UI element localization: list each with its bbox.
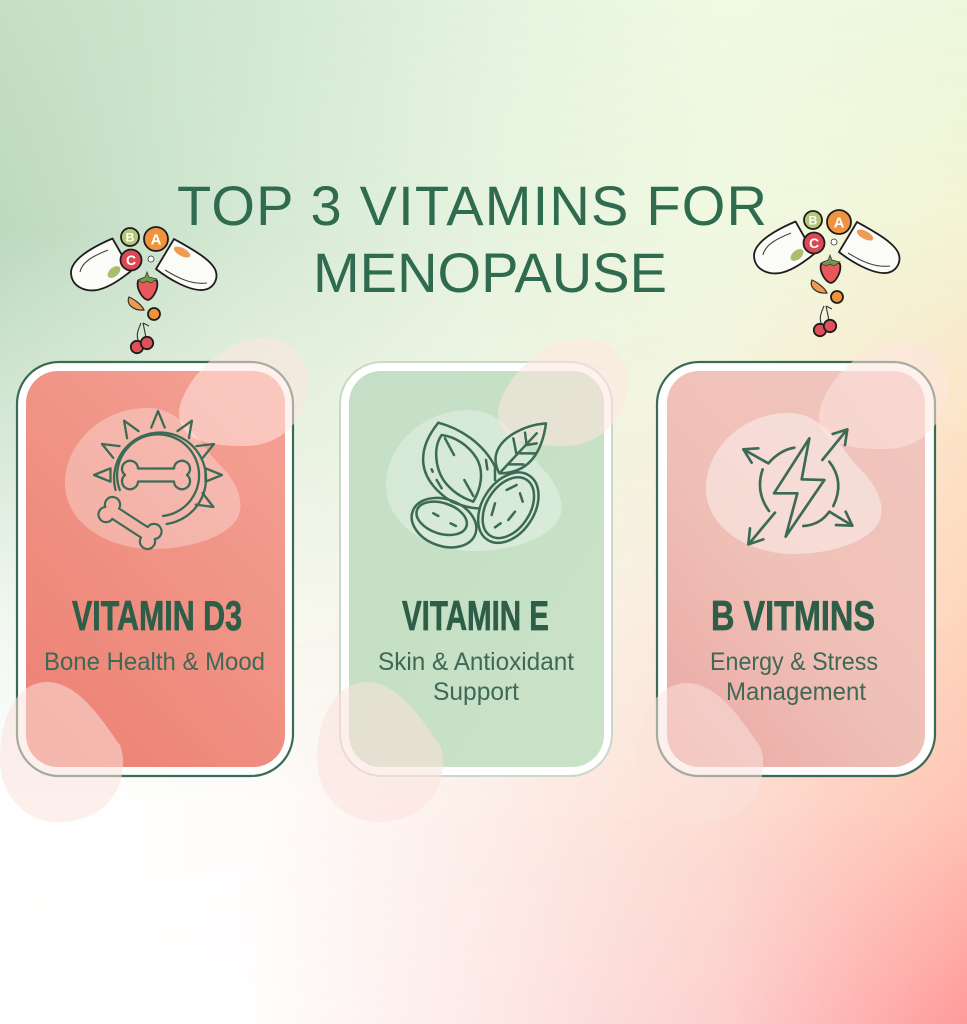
icon: capsule with vitamins and fruit, right [754,210,899,336]
heading: B Vitmins: B VITMINS [711,592,875,639]
icon: sun with bones [94,411,222,552]
panel: B Vitamins [637,341,948,823]
text: Energy & Stress Management: Energy & Stress [710,648,878,676]
text: Skin & Antioxidant Support: Support [433,678,519,706]
heading: Vitamin D3: VITAMIN D3 [72,592,242,639]
text: Energy & Stress Management: Management [726,678,866,706]
text: Skin & Antioxidant Support: Skin & Antioxidant [378,648,574,676]
text: Skin & Antioxidant Support [378,648,574,706]
icon: capsule with vitamins and fruit, right: B [809,214,818,228]
icon: capsule with vitamins and fruit, left: A [151,232,162,248]
title: MENOPAUSE [313,241,667,304]
icon: capsule with vitamins and fruit, right: A [834,214,845,232]
icon: capsule with vitamins and fruit, left: B [126,230,135,244]
icon: almonds and leaf [405,423,551,556]
icon: capsule with vitamins and fruit, left: C [126,252,136,268]
text: Energy & Stress Management [710,648,878,706]
title [177,174,767,304]
text: Bone Health & Mood: Bone Health & Mood [44,648,265,676]
icon: capsule with vitamins and fruit, left [71,227,216,353]
icon: capsule with vitamins and fruit, right: C [809,235,819,251]
heading: Vitamin E: VITAMIN E [402,592,549,639]
panel: Vitamin D3 [0,338,308,822]
icon: lightning bolt with arrows [743,429,852,544]
title: TOP 3 VITAMINS FOR [177,174,767,237]
panel: Vitamin E [317,338,627,822]
